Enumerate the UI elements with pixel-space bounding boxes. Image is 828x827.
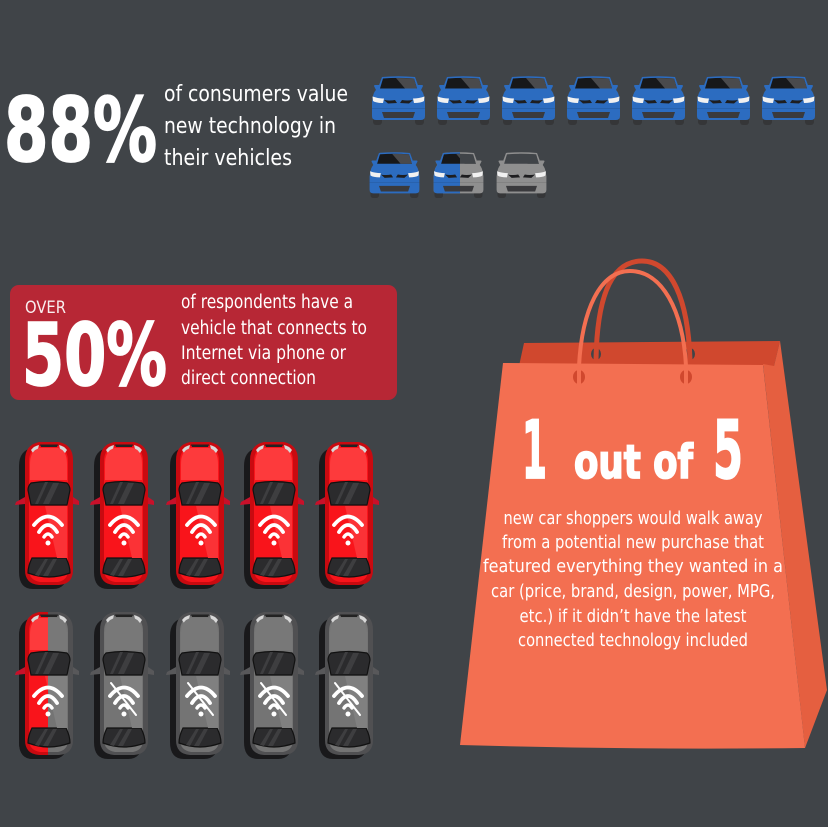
pictogram: blue cars xyxy=(370,76,815,198)
text: shoppers: from a potential new purchase that xyxy=(502,533,764,553)
half red car xyxy=(15,612,48,759)
text: shoppers xyxy=(483,509,783,651)
text: respondents: vehicle that connects to xyxy=(181,318,367,339)
text: respondents: direct connection xyxy=(181,368,316,389)
text: respondents xyxy=(181,292,367,389)
text: shoppers: connected technology included xyxy=(518,631,748,651)
heading: 1 out of 5: 5 xyxy=(713,404,743,497)
text: shoppers: car (price, brand, design, power, MPG, xyxy=(491,582,775,602)
text: shoppers: featured everything they wanted in a xyxy=(483,557,783,577)
rivets xyxy=(573,370,585,384)
heading: 1 out of 5: out of xyxy=(574,435,694,489)
stat: 88 percent xyxy=(4,79,348,182)
bag back panel xyxy=(519,341,780,366)
big number: 50%: 50% xyxy=(22,306,167,406)
bag side xyxy=(763,341,827,748)
back handle xyxy=(596,261,690,360)
text: consumers value technology: of consumers value xyxy=(164,82,348,107)
pictogram: grey unconnected cars xyxy=(15,612,379,759)
big number: 88%: 88% xyxy=(4,79,157,182)
text: consumers value technology: new technology in xyxy=(164,114,336,139)
heading: 1 out of 5: 1 xyxy=(522,404,547,497)
text: respondents: of respondents have a xyxy=(181,292,353,313)
text: shoppers: etc.) if it didn’t have the latest xyxy=(520,607,747,627)
text: consumers value technology: their vehicles xyxy=(164,146,292,171)
bag front xyxy=(460,363,805,749)
text: consumers value technology xyxy=(164,82,348,171)
front handle xyxy=(579,271,686,385)
label: over: OVER xyxy=(25,298,66,318)
pictogram: red connected cars xyxy=(15,442,379,589)
text: shoppers: new car shoppers would walk away xyxy=(504,509,762,529)
panel: over 50 percent xyxy=(10,285,397,406)
text: respondents: Internet via phone or xyxy=(181,343,346,364)
heading: 1 out of 5 xyxy=(522,404,743,497)
shopping bag xyxy=(460,261,827,749)
back rivets xyxy=(591,348,601,360)
